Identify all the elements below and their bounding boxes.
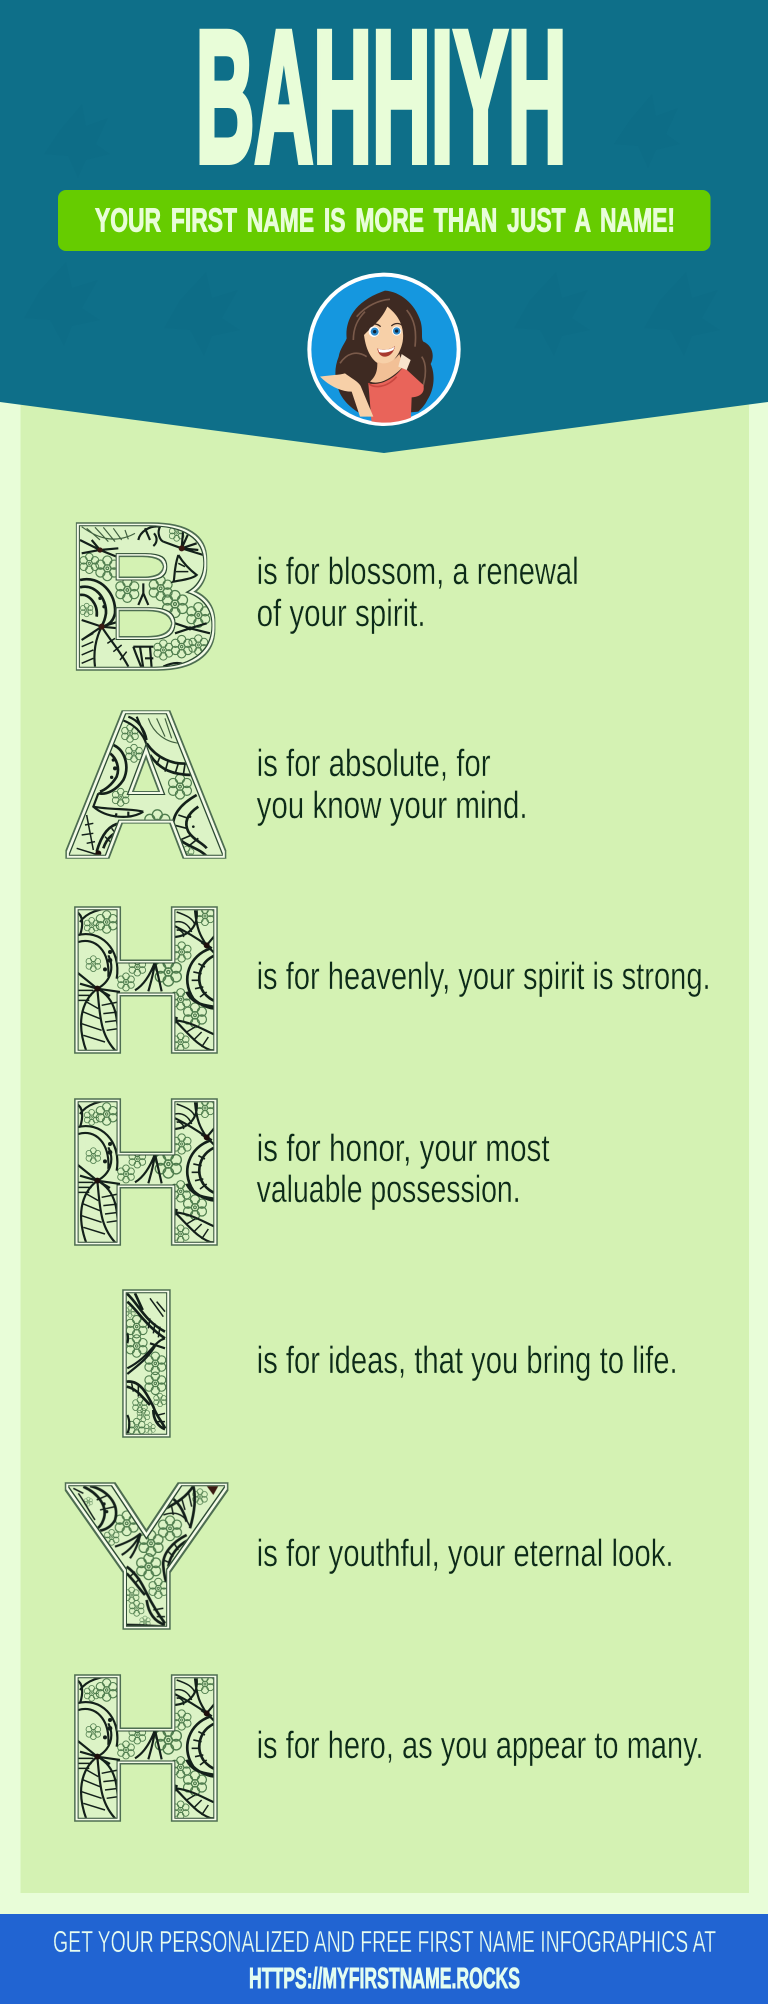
header banner with chevron: [0, 0, 768, 453]
panel: letters content background: [20, 380, 749, 1893]
letter H illustration: H: [67, 1639, 225, 1856]
text: B meaning: is for blossom, a renewal: [257, 551, 579, 593]
footer: HTTPS://MYFIRSTNAME.ROCKS: [249, 1963, 520, 1995]
text: H meaning: [257, 1128, 550, 1211]
letter Y illustration: Y: [71, 1447, 222, 1664]
tagline banner: [58, 190, 710, 251]
letter H illustration: [74, 1098, 218, 1246]
letter H illustration: [74, 1674, 218, 1822]
text: A meaning: [257, 743, 528, 827]
letter A illustration: [65, 710, 226, 859]
footer: [0, 1914, 768, 2004]
letter H illustration: H: [67, 1063, 225, 1280]
text: H meaning: valuable possession.: [257, 1169, 521, 1211]
text: A meaning: is for absolute, for: [257, 743, 491, 785]
letter Y illustration: [64, 1482, 229, 1630]
text: B meaning: [257, 551, 579, 635]
icon: woman avatar: [307, 273, 461, 426]
letter A illustration: A: [67, 673, 225, 896]
letter H illustration: H: [67, 871, 225, 1088]
letter I illustration: I: [115, 1254, 178, 1472]
text: A meaning: you know your mind.: [257, 785, 528, 827]
letter I illustration: [122, 1289, 171, 1438]
letter H illustration: [74, 906, 218, 1054]
text: B meaning: of your spirit.: [257, 593, 426, 635]
letter B illustration: [76, 522, 216, 671]
text: H meaning: is for honor, your most: [257, 1128, 550, 1170]
letter B illustration: B: [69, 486, 218, 706]
